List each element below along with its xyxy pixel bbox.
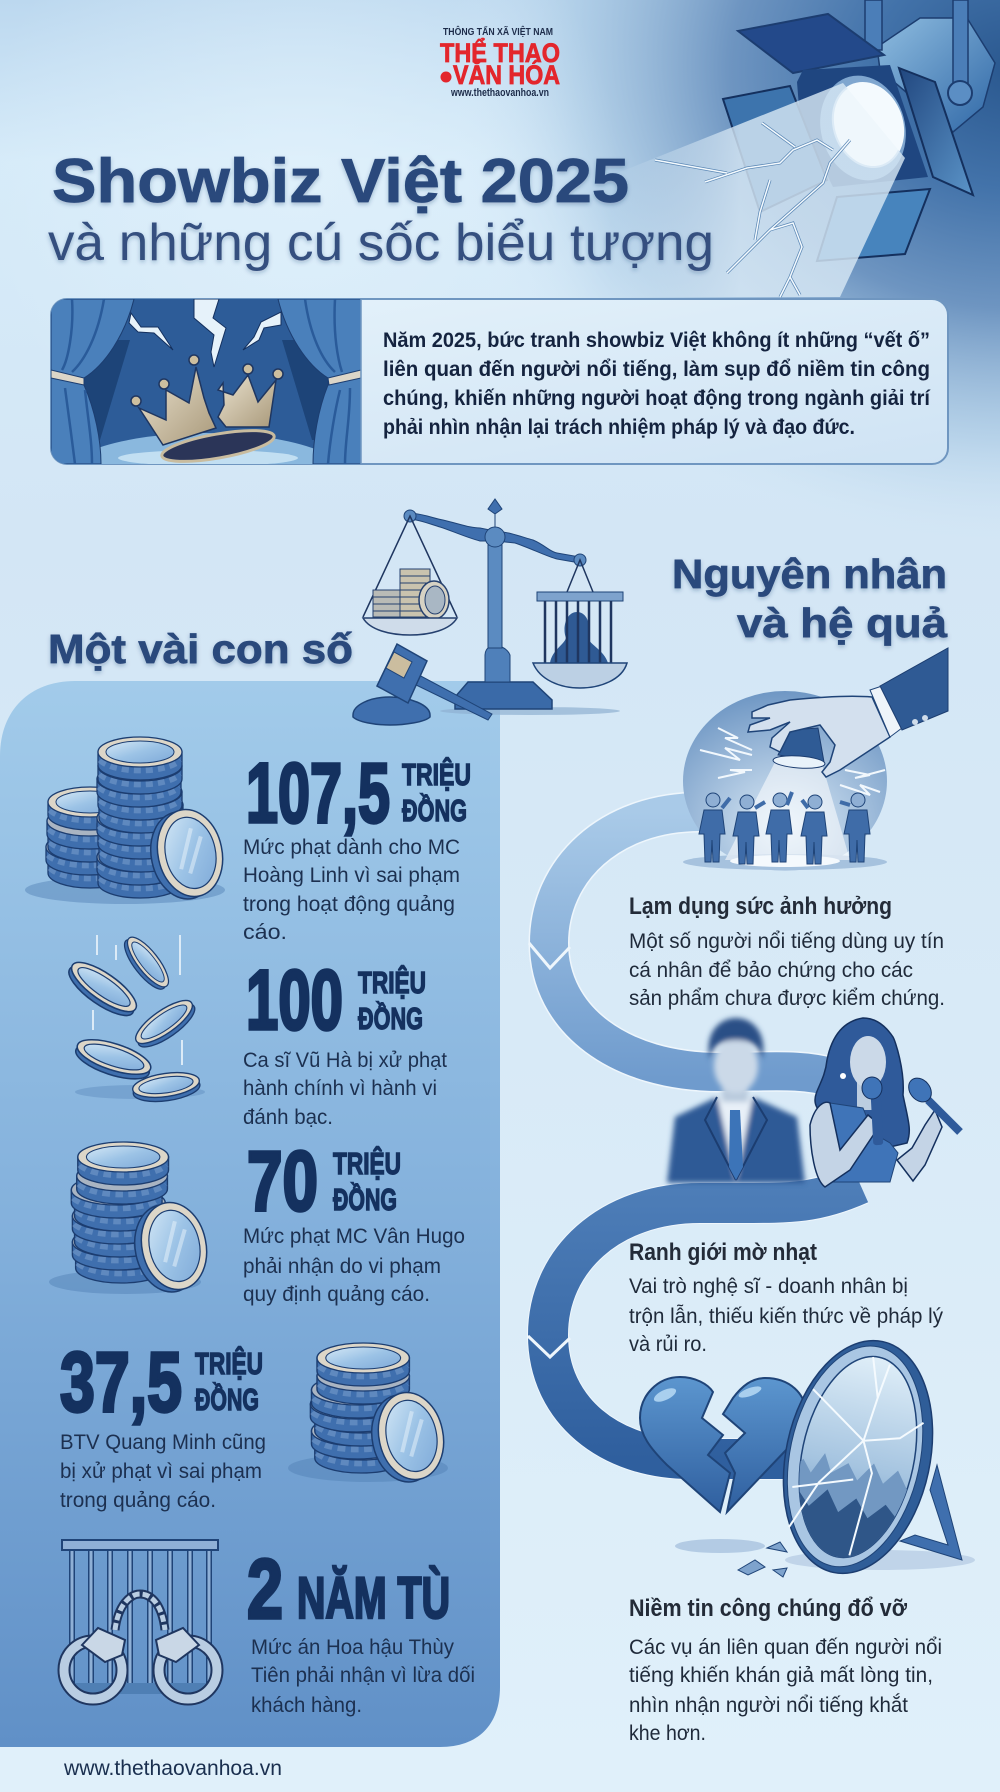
stat: 70 triệu đồng: 70 <box>247 1134 318 1228</box>
text block: Lạm dụng sức ảnh hưởng: Một số người nổi tiếng dùng uy tín <box>629 930 944 953</box>
text block: Niềm tin công chúng đổ vỡ: khe hơn. <box>629 1722 706 1745</box>
intro text <box>383 329 931 439</box>
heading: Nguyên nhân và hệ quả: và hệ quả <box>737 600 948 646</box>
stat: 100 triệu đồng: 100 <box>246 953 343 1047</box>
stat: 100 triệu đồng: ĐỒNG <box>358 1000 423 1036</box>
stat: 100 triệu đồng: đánh bạc. <box>243 1106 333 1129</box>
stat: 2 năm tù <box>247 1542 475 1717</box>
intro text: liên quan đến người nổi tiếng, làm sụp đổ niềm tin công <box>383 358 930 381</box>
icon: broken heart <box>640 1377 806 1512</box>
panel: intro <box>50 298 949 465</box>
text block: Ranh giới mờ nhạt: và rủi ro. <box>629 1333 707 1356</box>
stat: 37,5 triệu đồng: bị xử phạt vì sai phạm <box>60 1460 262 1483</box>
stat: 100 triệu đồng <box>243 953 447 1129</box>
title: Showbiz Việt 2025 <box>52 147 629 216</box>
logo <box>440 25 560 99</box>
text block: Niềm tin công chúng đổ vỡ: nhìn nhận người nổi tiếng khắt <box>629 1694 908 1717</box>
stat: 107,5 triệu đồng: TRIỆU <box>402 756 471 792</box>
stat: 70 triệu đồng: TRIỆU <box>333 1145 401 1181</box>
icon: coin stack 70 <box>49 1142 215 1298</box>
icon: hand removing spotlight over crowd <box>683 648 948 871</box>
stat: 37,5 triệu đồng: trong quảng cáo. <box>60 1489 216 1512</box>
stat: 100 triệu đồng: hành chính vì hành vi <box>243 1077 437 1100</box>
heading: Nguyên nhân và hệ quả <box>672 551 948 646</box>
footer website: www.thethaovanhoa.vn <box>63 1757 282 1780</box>
illustration: broken crown on stage <box>51 299 362 464</box>
text block: Niềm tin công chúng đổ vỡ: tiếng khiến khán giả mất lòng tin, <box>629 1664 933 1687</box>
stat: 107,5 triệu đồng: cáo. <box>243 921 287 944</box>
stat: 2 năm tù: Mức án Hoa hậu Thùy <box>251 1636 454 1659</box>
stat: 2 năm tù: khách hàng. <box>251 1694 362 1717</box>
heading: Nguyên nhân và hệ quả: Nguyên nhân <box>672 551 947 597</box>
logo: VĂN HÓA <box>453 59 560 90</box>
icon: prison bars and handcuffs <box>62 1540 218 1699</box>
stat: 100 triệu đồng: TRIỆU <box>358 964 426 1000</box>
stat: 2 năm tù: 2 <box>247 1542 283 1636</box>
intro text: chúng, khiến những người hoạt động trong ngành giải trí <box>383 387 931 410</box>
text block: Ranh giới mờ nhạt: trộn lẫn, thiếu kiến thức về pháp lý <box>629 1305 943 1328</box>
stat: 37,5 triệu đồng: BTV Quang Minh cũng <box>60 1431 266 1454</box>
arrow: ribbon 1 <box>529 812 835 1078</box>
stat: 107,5 triệu đồng <box>243 746 471 944</box>
spotlight illustration <box>600 0 995 297</box>
stat: 70 triệu đồng: Mức phạt MC Vân Hugo <box>243 1225 465 1248</box>
stat: 107,5 triệu đồng: 107,5 <box>246 746 390 840</box>
logo: THỂ THAO <box>440 37 560 68</box>
text block: Niềm tin công chúng đổ vỡ: Niềm tin công chúng đổ vỡ <box>629 1595 908 1622</box>
stat: 37,5 triệu đồng: 37,5 <box>60 1335 182 1429</box>
text block: Lạm dụng sức ảnh hưởng: cá nhân để bảo chứng cho các <box>629 959 913 982</box>
stat: 2 năm tù: Tiên phải nhận vì lừa dối <box>251 1664 475 1687</box>
stat: 107,5 triệu đồng: Mức phạt dành cho MC <box>243 836 460 859</box>
text block: Niềm tin công chúng đổ vỡ: Các vụ án liên quan đến người nổi <box>629 1636 942 1659</box>
stat: 70 triệu đồng: phải nhận do vi phạm <box>243 1255 441 1278</box>
stat: 70 triệu đồng <box>243 1134 465 1306</box>
text block: Lạm dụng sức ảnh hưởng: sản phẩm chưa được kiểm chứng. <box>629 987 945 1010</box>
text block: Lạm dụng sức ảnh hưởng <box>629 893 945 1010</box>
logo: www.thethaovanhoa.vn <box>450 87 549 99</box>
text block: Ranh giới mờ nhạt: Ranh giới mờ nhạt <box>629 1239 817 1266</box>
stat: 107,5 triệu đồng: ĐỒNG <box>402 792 467 828</box>
stat: 37,5 triệu đồng <box>60 1335 266 1512</box>
icon: coin stack 37,5 <box>288 1343 452 1488</box>
stat: 107,5 triệu đồng: trong hoạt động quảng <box>243 893 455 916</box>
stat: 107,5 triệu đồng: Hoàng Linh vì sai phạm <box>243 864 460 887</box>
icon: cracked mirror <box>675 1327 975 1587</box>
stat: 37,5 triệu đồng: TRIỆU <box>195 1345 263 1381</box>
subtitle: và những cú sốc biểu tượng <box>48 214 714 272</box>
stat: 100 triệu đồng: Ca sĩ Vũ Hà bị xử phạt <box>243 1049 447 1072</box>
logo: THÔNG TẤN XÃ VIỆT NAM <box>443 25 553 38</box>
stat: 2 năm tù: NĂM TÙ <box>297 1566 450 1631</box>
text block: Ranh giới mờ nhạt <box>629 1239 943 1356</box>
intro text: phải nhìn nhận lại trách nhiệm pháp lý và đạo đức. <box>383 416 855 439</box>
intro text: Năm 2025, bức tranh showbiz Việt không ít những “vết ố” <box>383 329 930 352</box>
stat: 70 triệu đồng: ĐỒNG <box>333 1181 397 1217</box>
stat: 37,5 triệu đồng: ĐỒNG <box>195 1381 259 1417</box>
text block: Niềm tin công chúng đổ vỡ <box>629 1595 942 1745</box>
icon: businessman and singer <box>667 1018 960 1187</box>
icon: coin stack 107,5 <box>25 737 231 905</box>
icon: falling coins <box>62 932 205 1105</box>
panel: left statistics <box>0 681 500 1747</box>
text block: Ranh giới mờ nhạt: Vai trò nghệ sĩ - doanh nhân bị <box>629 1275 908 1298</box>
arrow: ribbon 2 <box>528 1184 860 1459</box>
icon: scales of justice with gavel <box>353 499 627 725</box>
heading: Một vài con số: Một vài con số <box>48 626 353 672</box>
text block: Lạm dụng sức ảnh hưởng: Lạm dụng sức ảnh hưởng <box>629 893 892 920</box>
stat: 70 triệu đồng: quy định quảng cáo. <box>243 1283 430 1306</box>
